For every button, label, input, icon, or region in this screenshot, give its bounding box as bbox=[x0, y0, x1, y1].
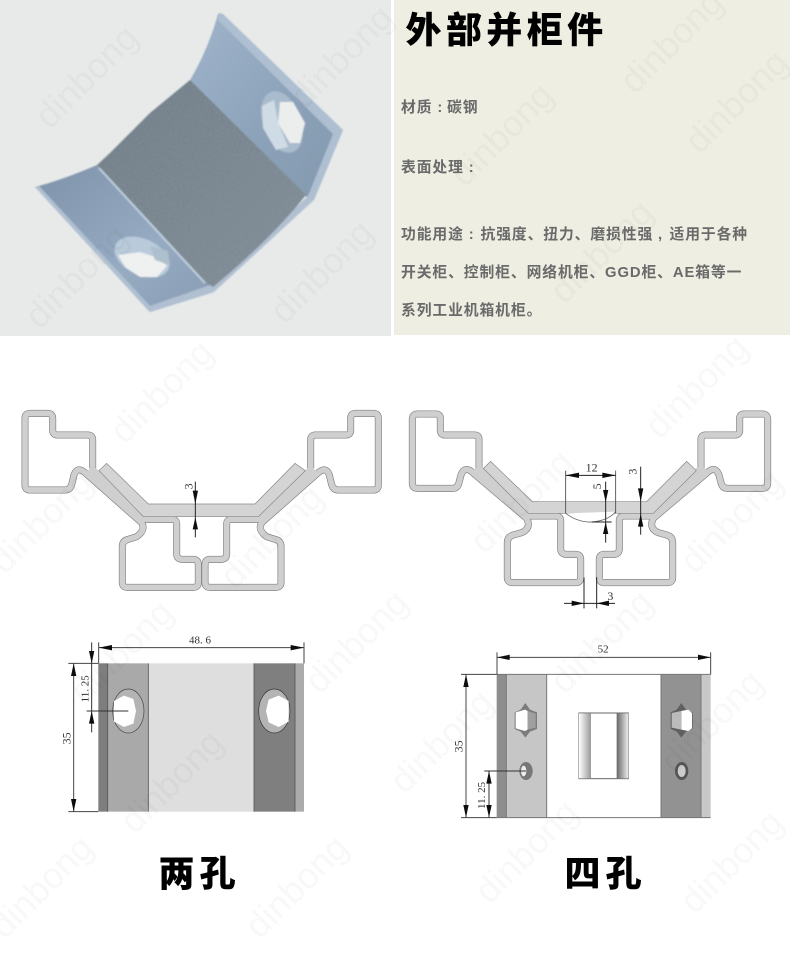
clamping plate bbox=[483, 461, 696, 513]
icon: metal bracket photo bbox=[35, 13, 343, 312]
dimension: 52 bbox=[497, 644, 711, 674]
watermarks: dinbong bbox=[441, 74, 561, 194]
watermarks: dinbong bbox=[261, 211, 381, 331]
dimension: 11.25 bbox=[476, 771, 526, 818]
watermarks: dinbong bbox=[671, 461, 790, 581]
text: function and use: , bbox=[658, 227, 663, 243]
profile left half bbox=[25, 413, 198, 587]
dimension: 35: 35 bbox=[451, 740, 465, 752]
dimension: 35 bbox=[451, 674, 497, 818]
profile right half bbox=[599, 414, 768, 583]
text: function and use: 抗强度、扭力、磨损性强 bbox=[480, 225, 653, 243]
text: function and use: 开关柜、控制柜、网络机柜、GGD柜、AE箱等一 bbox=[401, 263, 742, 281]
bracket upper hole bbox=[253, 85, 311, 159]
small hole right bbox=[675, 762, 688, 780]
dimension: 11.25: 11. 25 bbox=[476, 781, 488, 809]
profile right half bbox=[205, 413, 378, 587]
dimension: 12 bbox=[566, 461, 616, 478]
dimension: 48.6 bbox=[99, 634, 304, 663]
dimension: thickness 3: 3 bbox=[181, 483, 195, 489]
dimension: 5 bbox=[590, 482, 612, 543]
bracket lower rim bbox=[35, 186, 314, 312]
centre window bbox=[579, 713, 628, 779]
dimension: 5: 5 bbox=[590, 483, 604, 489]
bracket left wing bbox=[35, 165, 214, 312]
watermarks: dinbong bbox=[111, 721, 231, 841]
dimension: 12: 12 bbox=[586, 461, 598, 475]
dimension: gap 3: 3 bbox=[607, 589, 613, 603]
panel: product photo background bbox=[0, 0, 391, 336]
label: two holes: 两孔 bbox=[158, 853, 241, 894]
text: function and use: 适用于各种 bbox=[670, 225, 748, 243]
panel: description background bbox=[394, 0, 790, 335]
watermarks: dinbong bbox=[466, 791, 586, 911]
centre punched tab bbox=[566, 512, 616, 522]
dimension: 35: 35 bbox=[60, 732, 74, 744]
watermarks: dinbong bbox=[381, 681, 501, 801]
watermarks: dinbong bbox=[461, 441, 581, 561]
hexagon hole left bbox=[515, 703, 537, 738]
bracket lower hole bbox=[108, 228, 176, 286]
label: four holes: 四孔 bbox=[564, 853, 647, 894]
text: function and use: 功能用途 : bbox=[401, 227, 475, 243]
dimension: 48.6: 48. 6 bbox=[189, 634, 211, 646]
watermarks: dinbong bbox=[296, 581, 416, 701]
hole right bbox=[259, 689, 290, 733]
text: function and use bbox=[401, 225, 748, 319]
watermarks: dinbong bbox=[541, 191, 661, 311]
bracket centre plate bbox=[97, 80, 306, 287]
watermarks: dinbong bbox=[26, 16, 146, 136]
dimension: 11.25 bbox=[79, 642, 128, 732]
dimension: thickness 3 bbox=[181, 482, 198, 537]
title: 外部并柜件 bbox=[406, 10, 608, 50]
bracket right wing bbox=[190, 13, 343, 200]
watermarks: dinbong bbox=[101, 331, 221, 451]
text: material: 碳钢 bbox=[447, 98, 478, 116]
hexagon hole right bbox=[671, 703, 693, 738]
chart: two-hole cross section bbox=[25, 413, 378, 587]
watermarks: dinbong bbox=[236, 826, 356, 946]
watermarks: dinbong bbox=[651, 661, 771, 781]
text: material: 材质 : bbox=[401, 100, 443, 116]
dimension: 35 bbox=[60, 663, 98, 812]
watermarks: dinbong bbox=[541, 581, 661, 701]
plate strips bbox=[497, 674, 711, 818]
dimension: gap 3 bbox=[564, 577, 615, 608]
chart: two-hole plan view bbox=[60, 634, 304, 812]
watermarks: dinbong bbox=[211, 476, 331, 596]
dimension: 11.25: 11. 25 bbox=[79, 675, 91, 702]
clamping plate bbox=[99, 463, 305, 517]
plate strips bbox=[98, 663, 304, 812]
chart: four-hole cross section bbox=[412, 414, 768, 608]
dimension: thickness 3 right bbox=[625, 467, 643, 535]
hole left bbox=[113, 689, 144, 733]
bracket right wing rim bbox=[218, 14, 343, 200]
watermarks: dinbong bbox=[671, 801, 790, 921]
small hole left bbox=[519, 762, 533, 780]
dimension: thickness 3 right: 3 bbox=[625, 469, 639, 475]
watermarks: dinbong bbox=[16, 216, 136, 336]
text: surface treatment: 表面处理 : bbox=[401, 158, 475, 176]
text: function and use: 系列工业机箱机柜。 bbox=[401, 301, 542, 319]
watermarks: dinbong bbox=[61, 591, 181, 711]
chart: four-hole plan view bbox=[451, 644, 711, 818]
dimension: 52: 52 bbox=[598, 644, 609, 656]
profile left half bbox=[412, 414, 581, 583]
watermarks: dinbong bbox=[636, 326, 756, 446]
